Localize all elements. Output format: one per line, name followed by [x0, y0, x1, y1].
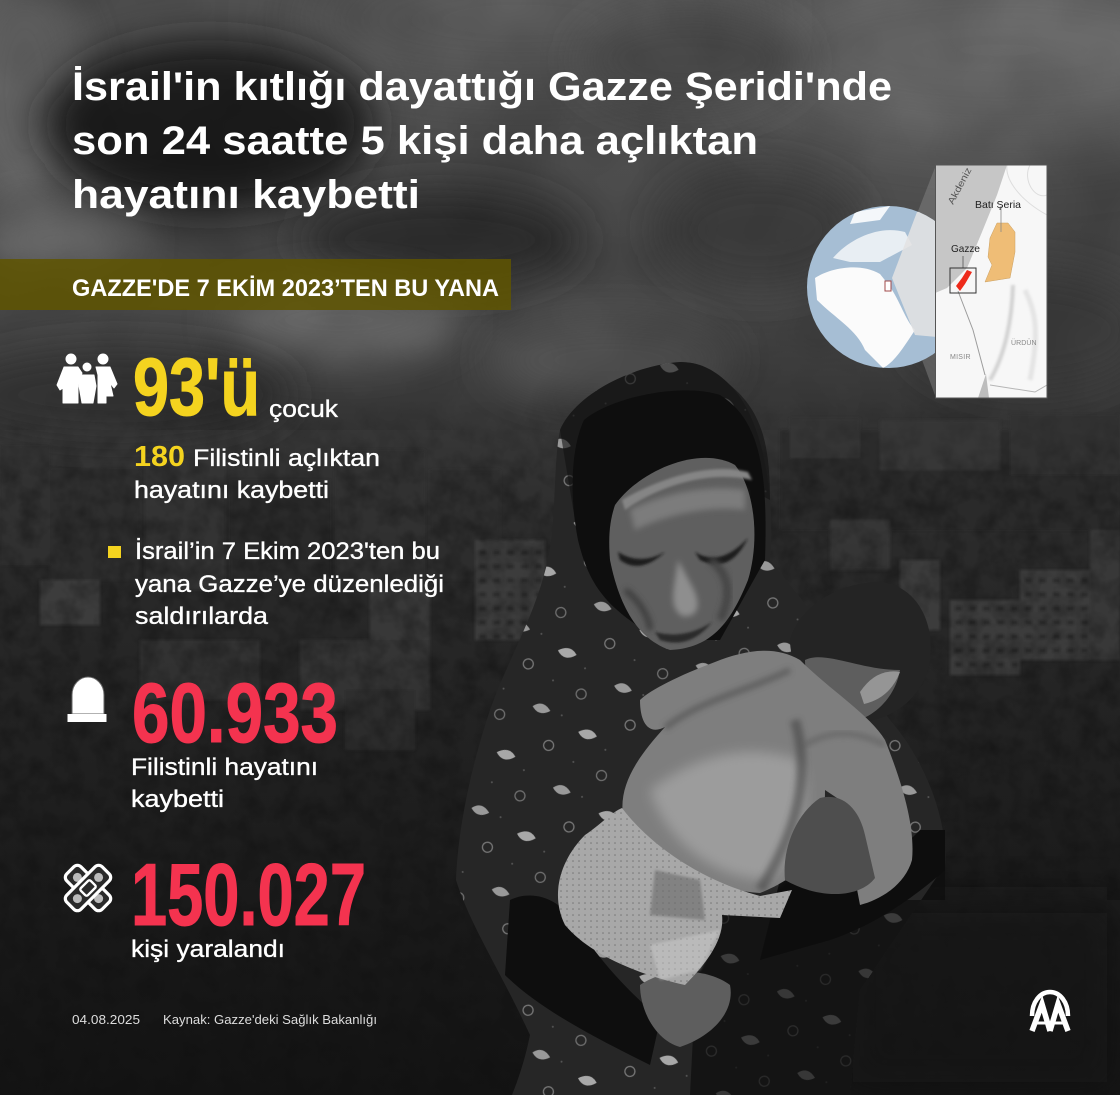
subtitle band: [0, 259, 511, 310]
map panel: ÜRDÜN: [1011, 339, 1037, 347]
map panel: MISIR: [950, 354, 971, 361]
text: starvation deaths: [134, 441, 380, 504]
logo: AA: [1032, 992, 1068, 1031]
mother's lower hand: [640, 972, 731, 1047]
map panel: Gazze: [951, 243, 980, 255]
Gaza box: [950, 268, 976, 293]
stat: wounded: [131, 845, 366, 963]
icon: gravestone: [68, 677, 106, 722]
stat: killed: Filistinli hayatını: [131, 754, 318, 781]
stat: 93'ü children: 93'ü: [133, 342, 260, 433]
footer: date and source: [72, 1013, 377, 1027]
bullet text: attacks since 7 October: yana Gazze’ye düzenlediği: [135, 571, 444, 598]
stat: killed: 60.933: [132, 666, 338, 760]
scarf and clothing: [456, 362, 945, 1095]
icon: family: [57, 354, 117, 403]
title: hayatını kaybetti: [72, 173, 420, 217]
map panel: [935, 165, 1047, 398]
baby wrap: [558, 808, 792, 985]
title: [72, 65, 892, 217]
subtitle band: GAZZE'DE 7 EKİM 2023’TEN BU YANA: [72, 275, 499, 302]
bullet text: attacks since 7 October: [108, 538, 444, 630]
West Bank: [985, 223, 1015, 282]
zoom cone: [892, 165, 936, 398]
title: son 24 saatte 5 kişi daha açlıktan: [72, 119, 758, 163]
Gaza strip: [956, 270, 972, 291]
locator map: [807, 165, 1047, 398]
map panel: Batı Şeria: [975, 199, 1021, 211]
bullet text: attacks since 7 October: saldırılarda: [135, 603, 269, 630]
scarf dark overlay: [560, 362, 770, 520]
stat: 93'ü children: çocuk: [269, 396, 339, 423]
text: starvation deaths: Filistinli açlıktan: [193, 445, 380, 472]
baby head: [790, 582, 931, 722]
footer: date and source: 04.08.2025: [72, 1013, 140, 1027]
dark sleeves: [505, 895, 660, 1065]
sea: [935, 165, 1007, 293]
title: İsrail'in kıtlığı dayattığı Gazze Şeridi'nde: [72, 65, 892, 109]
text: starvation deaths: hayatını kaybetti: [134, 477, 329, 504]
photo: mother holding emaciated baby: [456, 362, 945, 1095]
icon: bandage: [63, 863, 113, 913]
text: starvation deaths: 180: [134, 441, 185, 473]
bullet text: attacks since 7 October: İsrail’in 7 Ekim 2023'ten bu: [135, 538, 440, 565]
globe: [807, 206, 935, 368]
stat: killed: [131, 666, 338, 813]
footer: date and source: Kaynak: Gazze'deki Sağlık Bakanlığı: [163, 1013, 377, 1027]
stat: wounded: 150.027: [131, 845, 366, 944]
map panel: Akdeniz: [946, 166, 975, 206]
black hood: [573, 390, 766, 640]
stat: killed: kaybetti: [131, 786, 224, 813]
baby body: [622, 651, 913, 905]
face: [609, 458, 754, 650]
stat: wounded: kişi yaralandı: [131, 936, 285, 963]
lower scarf shadow: [690, 865, 945, 1095]
mother's upper hand: [785, 797, 875, 894]
